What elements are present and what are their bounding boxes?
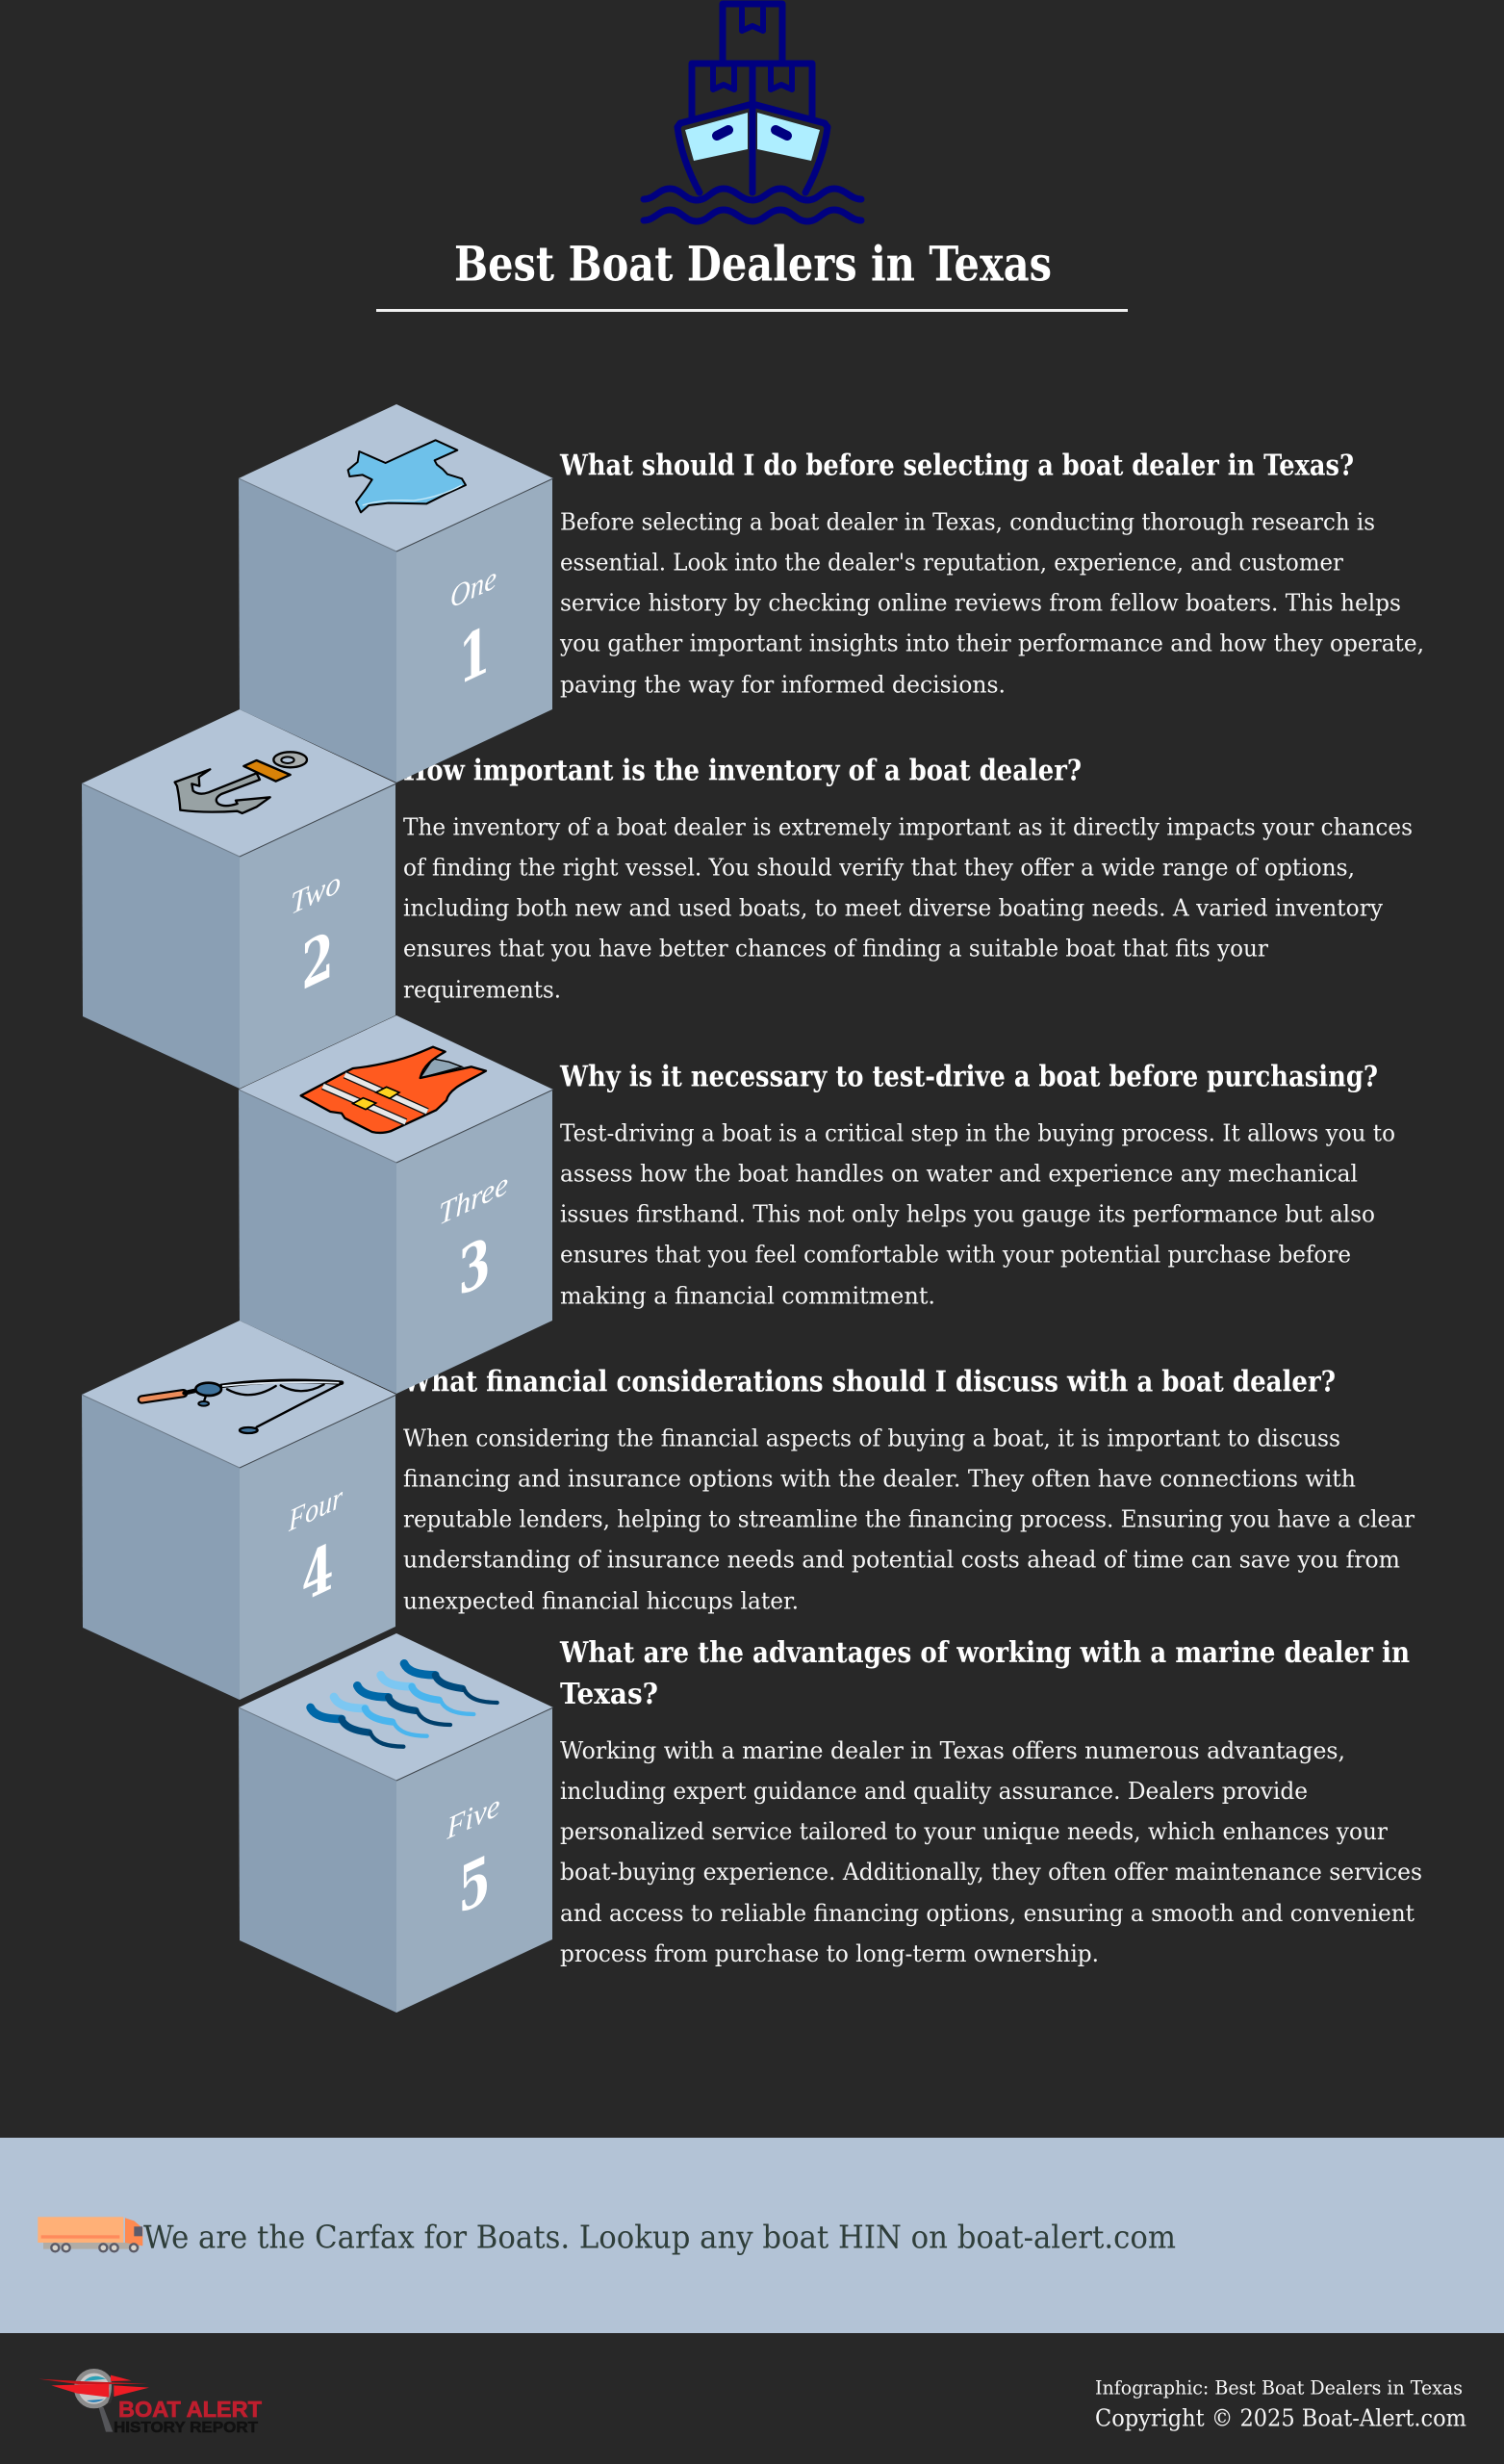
text block: question 2: of finding the right vessel. You should verify that they offer a wide range of options, <box>403 853 1355 882</box>
logo: Boat Alert History Report: BOAT ALERT <box>118 2397 262 2422</box>
panel: cube four <box>82 1321 396 1700</box>
label: Four: Four <box>288 1479 344 1539</box>
number: 5: 5 <box>458 1840 491 1930</box>
text block: question 3: Why is it necessary to test-drive a boat before purchasing? <box>559 1059 1378 1093</box>
text block: question 3: making a financial commitment. <box>560 1282 935 1309</box>
icon: anchor <box>175 752 307 813</box>
text block: question 2 <box>403 753 1413 1003</box>
text block: question 3 <box>559 1059 1395 1309</box>
text block: question 2: How important is the inventory of a boat dealer? <box>403 753 1082 787</box>
icon: truck <box>38 2217 142 2251</box>
panel: cube two <box>82 709 396 1089</box>
icon: cargo ship <box>644 4 861 221</box>
icon: Texas map <box>348 440 466 512</box>
label: One: One <box>450 560 497 616</box>
text block: question 3: Test-driving a boat is a critical step in the buying process. It allows you to <box>560 1118 1395 1147</box>
text block: question 5: boat-buying experience. Additionally, they often offer maintenance services <box>560 1858 1422 1886</box>
number: 4: 4 <box>301 1528 334 1618</box>
text block: question 4: unexpected financial hiccups later. <box>403 1586 799 1615</box>
text block: question 1: service history by checking online reviews from fellow boaters. This helps <box>560 589 1401 616</box>
text block: question 2: requirements. <box>403 976 561 1003</box>
panel: cube five <box>239 1633 553 2013</box>
logo: Boat Alert History Report: HISTORY REPORT <box>114 2420 258 2436</box>
icon: fishing rod <box>141 1381 342 1433</box>
footer caption: Infographic: Best Boat Dealers in Texas <box>1095 2377 1463 2399</box>
text block: question 2: ensures that you have better chances of finding a suitable boat that fits your <box>403 934 1268 962</box>
text block: question 3: assess how the boat handles on water and experience any mechanical <box>560 1159 1358 1188</box>
text block: question 5: including expert guidance and quality assurance. Dealers provide <box>560 1777 1308 1805</box>
text block: question 1: What should I do before selecting a boat dealer in Texas? <box>559 449 1354 481</box>
text block: question 4: understanding of insurance needs and potential costs ahead of time can save you from <box>403 1546 1400 1573</box>
text block: question 4: What financial considerations should I discuss with a boat dealer? <box>402 1365 1336 1398</box>
icon: water waves <box>311 1663 497 1747</box>
banner text: We are the Carfax for Boats. Lookup any boat HIN on boat-alert.com <box>143 2218 1176 2256</box>
banner background <box>0 2138 1504 2333</box>
footer copyright: Copyright © 2025 Boat-Alert.com <box>1095 2404 1466 2431</box>
text block: question 4: When considering the financial aspects of buying a boat, it is important to discuss <box>403 1424 1340 1451</box>
text block: question 4 <box>402 1365 1415 1615</box>
text block: question 4: financing and insurance options with the dealer. They often have connections with <box>403 1465 1356 1492</box>
text block: question 1: you gather important insights into their performance and how they operate, <box>559 629 1424 656</box>
text block: question 2: The inventory of a boat dealer is extremely important as it directly impacts your chances <box>403 812 1413 841</box>
number: 3: 3 <box>458 1222 491 1312</box>
number: 2: 2 <box>301 916 334 1006</box>
text block: question 5: process from purchase to long-term ownership. <box>560 1939 1099 1967</box>
text block: question 1: Before selecting a boat dealer in Texas, conducting thorough research is <box>560 508 1375 535</box>
text block: question 3: issues firsthand. This not only helps you gauge its performance but also <box>560 1199 1375 1228</box>
label: Five: Five <box>446 1788 500 1847</box>
number: 1: 1 <box>458 611 491 701</box>
text block: question 3: ensures that you feel comfortable with your potential purchase before <box>560 1240 1351 1269</box>
text block: question 5: What are the advantages of working with a marine dealer in <box>559 1635 1410 1669</box>
text block: question 5: Texas? <box>560 1677 658 1710</box>
logo: Boat Alert History Report <box>38 2371 262 2436</box>
label: Three: Three <box>439 1167 508 1233</box>
icon: life vest <box>301 1047 486 1133</box>
text block: question 5: personalized service tailored to your unique needs, which enhances your <box>560 1817 1388 1845</box>
text block: question 4: reputable lenders, helping to streamline the financing process. Ensuring you have a clear <box>403 1505 1415 1532</box>
text block: question 2: including both new and used boats, to meet diverse boating needs. A varied inventory <box>403 893 1383 922</box>
panel: cube three <box>239 1015 553 1394</box>
text block: question 5: Working with a marine dealer in Texas offers numerous advantages, <box>560 1736 1345 1764</box>
text block: question 1: essential. Look into the dealer's reputation, experience, and customer <box>560 549 1343 576</box>
text block: question 1: paving the way for informed decisions. <box>560 670 1006 699</box>
text block: question 5 <box>559 1635 1422 1967</box>
text block: question 5: and access to reliable financing options, ensuring a smooth and convenient <box>560 1899 1415 1927</box>
text block: question 1 <box>559 449 1424 699</box>
label: Two: Two <box>291 864 341 922</box>
panel: cube one <box>239 404 553 783</box>
title: Best Boat Dealers in Texas <box>454 235 1052 293</box>
title underline <box>376 309 1128 312</box>
